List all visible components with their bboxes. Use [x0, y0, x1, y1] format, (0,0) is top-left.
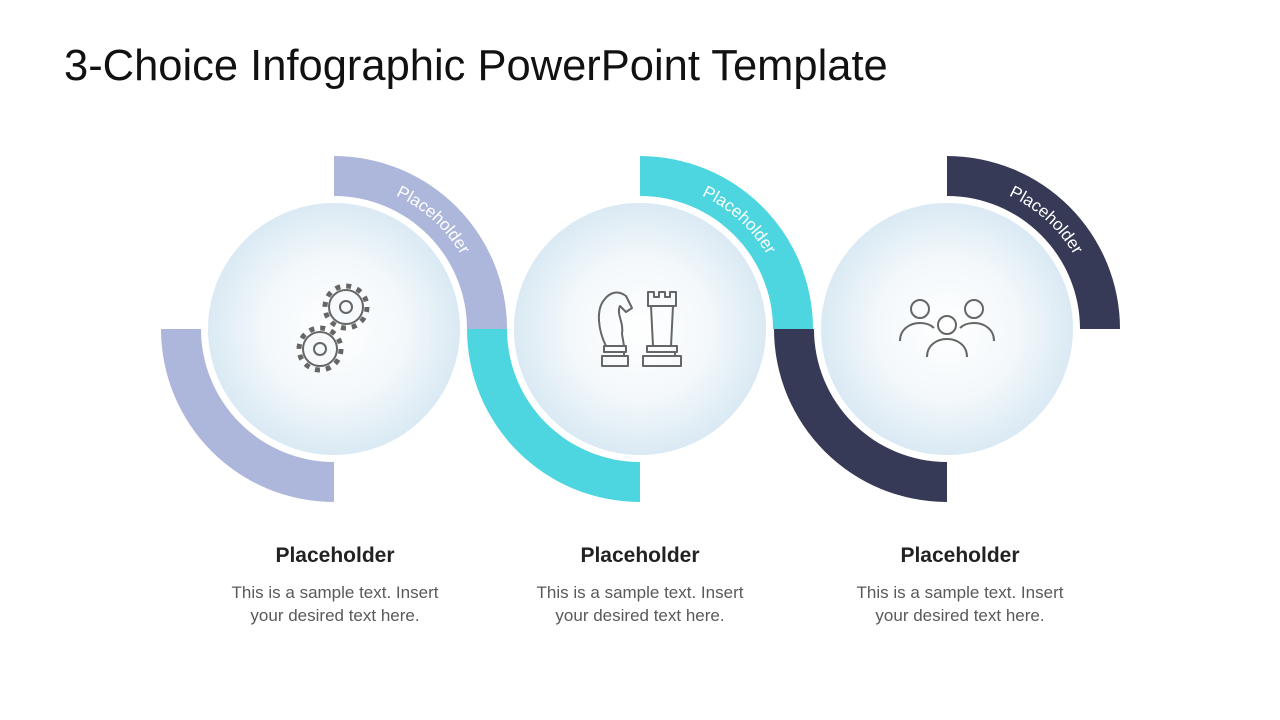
icon: chess — [599, 292, 681, 366]
circle 1 — [206, 201, 462, 457]
icon: gears — [299, 286, 367, 370]
caption 3: This is a sample text. Insert — [857, 583, 1063, 602]
arc: cyan bottom-left — [467, 329, 640, 502]
caption 2 — [536, 544, 744, 625]
arc: cyan top-right: Placeholder — [702, 186, 775, 252]
arc: lavender top-right — [334, 156, 507, 329]
caption 1: Placeholder — [275, 544, 395, 567]
arc: lavender bottom-left — [161, 329, 334, 502]
caption 3: Placeholder — [900, 544, 1020, 567]
arc: navy top-right: Placeholder — [1010, 186, 1082, 252]
title: 3-Choice Infographic PowerPoint Template — [64, 42, 888, 90]
caption 3 — [856, 544, 1064, 625]
caption 1: your desired text here. — [250, 606, 420, 625]
arc: lavender top-right: Placeholder — [397, 186, 469, 252]
circle 2 — [512, 201, 768, 457]
caption 2: Placeholder — [580, 544, 700, 567]
caption 2: This is a sample text. Insert — [537, 583, 743, 602]
arc: navy bottom-left — [774, 329, 947, 502]
icon: people — [900, 300, 994, 357]
arc: navy top-right — [947, 156, 1120, 329]
arc: cyan top-right — [640, 156, 813, 329]
caption 3: your desired text here. — [875, 606, 1045, 625]
caption 1: This is a sample text. Insert — [232, 583, 438, 602]
caption 2: your desired text here. — [555, 606, 725, 625]
caption 1 — [232, 544, 438, 625]
circle 3 — [819, 201, 1075, 457]
